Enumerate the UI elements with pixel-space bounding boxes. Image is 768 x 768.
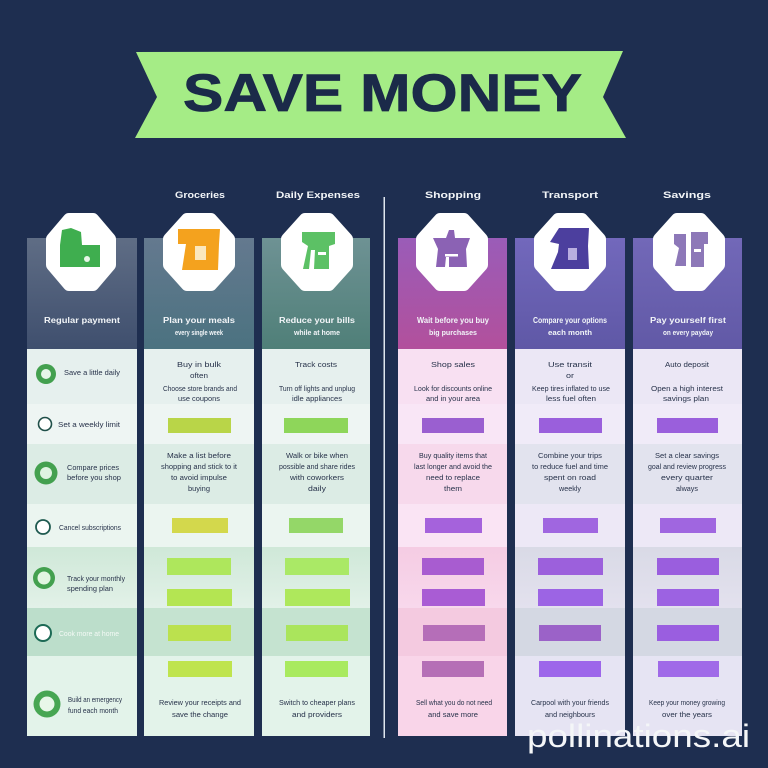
row 3 label — [67, 463, 121, 482]
column 2 heading: Plan your meals — [163, 316, 236, 325]
row 3 text: to reduce fuel and time — [532, 464, 608, 471]
column 3 heading: Reduce your bills — [279, 316, 356, 325]
row 1 text: Auto deposit — [665, 362, 709, 369]
row 7 text: Sell what you do not need — [416, 700, 492, 707]
panel: column 5 — [515, 190, 625, 736]
row 7 text — [531, 700, 609, 719]
bar: row 7 — [422, 661, 484, 677]
column 6 rows — [633, 349, 742, 736]
icon: column 2 badge — [169, 219, 229, 285]
column 3 top label: Daily Expenses — [276, 190, 360, 200]
row 1 text: savings plan — [663, 396, 709, 403]
bar: row 6 — [168, 625, 231, 641]
column 3 heading: while at home — [293, 330, 340, 337]
row 1 text — [414, 362, 492, 403]
row 7 label: fund each month — [68, 706, 118, 715]
panel: column 4 — [398, 190, 507, 736]
row 1 text: Choose store brands and — [163, 386, 237, 393]
row 3 text: goal and review progress — [648, 464, 726, 471]
row 7 label: Build an emergency — [68, 695, 122, 704]
column 6 heading: on every payday — [663, 330, 713, 337]
row 7 text: over the years — [662, 712, 713, 719]
column 1 heading: Regular payment — [44, 316, 120, 325]
row 7 text — [159, 700, 241, 719]
bar: row 6 — [286, 625, 348, 641]
bar: row 5 lower — [422, 589, 485, 606]
row 3 text: with coworkers — [289, 475, 345, 482]
column 1 rows — [27, 349, 137, 736]
row 3 text — [279, 453, 355, 493]
bar: row 5 upper — [285, 558, 349, 575]
row 1 text: Buy in bulk — [177, 362, 222, 369]
row 3 text: to avoid impulse — [171, 475, 227, 482]
row 3 text: Make a list before — [167, 453, 231, 460]
column 4 rows — [398, 349, 507, 736]
row 1 text: and in your area — [426, 396, 480, 403]
column 5 rows — [515, 349, 625, 736]
icon: row 7 — [34, 690, 60, 718]
column 2 header — [144, 238, 254, 349]
icon: row 3 — [34, 462, 58, 484]
row 3 text: Walk or bike when — [286, 453, 348, 460]
column 3 heading — [279, 316, 356, 337]
column 6 heading — [650, 316, 726, 337]
bar: row 7 — [539, 661, 601, 677]
row 7 text — [649, 700, 725, 719]
row 1 text: idle appliances — [292, 396, 343, 403]
column 4 heading: big purchases — [429, 330, 477, 337]
row 1 text — [163, 362, 237, 403]
row 7 label — [68, 695, 122, 715]
row 5 label: spending plan — [67, 584, 113, 593]
row 3 text: always — [676, 486, 699, 493]
row 1 label: Save a little daily — [64, 368, 120, 377]
row 3 text: buying — [188, 486, 210, 493]
column 5 header — [515, 238, 625, 349]
bar: row 4 — [425, 518, 482, 533]
row 7 text: Keep your money growing — [649, 700, 725, 707]
title text: SAVE MONEY — [183, 64, 582, 123]
row 1 text: or — [566, 373, 575, 380]
row 7 text: and save more — [428, 712, 478, 719]
bar: row 6 — [539, 625, 601, 641]
bar: row 5 lower — [167, 589, 232, 606]
bar: row 2 — [657, 418, 718, 433]
bar: row 2 — [284, 418, 348, 433]
icon: row 4 — [36, 520, 50, 534]
row 1 text: Use transit — [548, 362, 592, 369]
row 4 label: Cancel subscriptions — [59, 523, 121, 532]
row 7 text — [279, 700, 356, 719]
watermark: pollinations.ai — [527, 718, 750, 754]
column 6 heading: Pay yourself first — [650, 316, 726, 325]
row 5 label: Track your monthly — [67, 574, 125, 583]
row 7 text: Switch to cheaper plans — [279, 700, 356, 707]
panel: column 6 — [633, 190, 742, 736]
ribbon shape — [135, 51, 626, 138]
bar: row 5 upper — [167, 558, 231, 575]
bar: row 5 upper — [538, 558, 603, 575]
bar: row 7 — [285, 661, 348, 677]
row 3 text: last longer and avoid the — [414, 464, 492, 471]
column 6 header — [633, 238, 742, 349]
bar: row 4 — [172, 518, 228, 533]
row 3 text: need to replace — [426, 475, 480, 482]
bar: row 4 — [289, 518, 343, 533]
row 2 label: Set a weekly limit — [58, 420, 121, 429]
icon: column 1 badge — [52, 219, 110, 285]
divider — [384, 197, 385, 738]
column 2 top label: Groceries — [175, 190, 225, 200]
bar: row 5 lower — [657, 589, 719, 606]
row 7 text: and neighbours — [545, 712, 596, 719]
row 1 text — [651, 362, 723, 403]
row 3 text — [532, 453, 608, 493]
row 3 text: possible and share rides — [279, 464, 355, 471]
bar: row 4 — [543, 518, 598, 533]
row 1 text: often — [190, 373, 208, 380]
row 1 text: less fuel often — [546, 396, 596, 403]
row 7 text: Review your receipts and — [159, 700, 241, 707]
row 3 label: Compare prices — [67, 463, 119, 472]
bar: row 2 — [539, 418, 602, 433]
column 5 heading: Compare your options — [533, 316, 607, 325]
column 2 heading — [163, 316, 236, 337]
bar: row 6 — [423, 625, 485, 641]
panel: column 3 — [262, 190, 370, 736]
row 1 text: Open a high interest — [651, 386, 723, 393]
row 1 text — [279, 362, 355, 403]
bar: row 5 lower — [285, 589, 350, 606]
row 3 text — [414, 453, 492, 493]
column 2 rows — [144, 349, 254, 736]
bar: row 5 upper — [657, 558, 719, 575]
row 1 text: Turn off lights and unplug — [279, 386, 355, 393]
icon: row 5 — [33, 567, 55, 589]
bar: row 7 — [658, 661, 719, 677]
column 4 header — [398, 238, 507, 349]
column 3 header — [262, 238, 370, 349]
row 3 text: daily — [308, 486, 327, 493]
column 5 heading — [533, 316, 607, 337]
row 3 text: Combine your trips — [538, 453, 603, 460]
bar: row 6 — [657, 625, 719, 641]
title banner — [135, 51, 626, 138]
column 6 top label: Savings — [663, 190, 711, 200]
row 3 text: weekly — [558, 486, 582, 493]
bar: row 5 upper — [422, 558, 484, 575]
bar: row 4 — [660, 518, 716, 533]
icon: column 5 badge — [540, 219, 600, 285]
row 1 text: use coupons — [178, 396, 221, 403]
row 6 label: Cook more at home — [59, 629, 119, 638]
row 1 text — [532, 362, 610, 403]
bar: row 2 — [168, 418, 231, 433]
column 4 heading: Wait before you buy — [417, 316, 490, 325]
row 7 text — [416, 700, 492, 719]
column 1 header — [27, 238, 137, 349]
icon: row 1 — [36, 364, 56, 384]
icon: row 2 — [38, 418, 52, 430]
column 4 heading — [417, 316, 490, 337]
row 3 text — [161, 453, 237, 493]
panel: column 2 — [144, 190, 254, 736]
row 3 text — [648, 453, 726, 493]
column 3 rows — [262, 349, 370, 736]
row 3 text: every quarter — [661, 475, 714, 482]
bar: row 7 — [168, 661, 232, 677]
row 7 text: save the change — [172, 712, 228, 719]
icon: row 6 — [35, 625, 51, 641]
row 5 label — [67, 574, 125, 593]
row 3 text: spent on road — [544, 475, 596, 482]
icon: column 6 badge — [659, 219, 719, 285]
row 1 text: Track costs — [295, 362, 338, 369]
row 3 text: Buy quality items that — [419, 453, 487, 460]
row 3 text: Set a clear savings — [655, 453, 720, 460]
row 7 text: and providers — [292, 712, 343, 719]
row 3 text: shopping and stick to it — [161, 464, 237, 471]
row 7 text: Carpool with your friends — [531, 700, 609, 707]
bar: row 5 lower — [538, 589, 603, 606]
icon: column 4 badge — [422, 219, 482, 285]
column 5 heading: each month — [548, 330, 592, 337]
column 5 top label: Transport — [542, 190, 598, 200]
column 4 top label: Shopping — [425, 190, 481, 200]
row 1 text: Look for discounts online — [414, 386, 492, 393]
row 3 label: before you shop — [67, 473, 121, 482]
bar: row 2 — [422, 418, 484, 433]
panel: column 1 row labels — [27, 219, 137, 736]
row 1 text: Keep tires inflated to use — [532, 386, 610, 393]
row 3 text: them — [444, 486, 462, 493]
row 1 text: Shop sales — [431, 362, 476, 369]
icon: column 3 badge — [287, 219, 347, 285]
column 2 heading: every single week — [175, 330, 223, 337]
